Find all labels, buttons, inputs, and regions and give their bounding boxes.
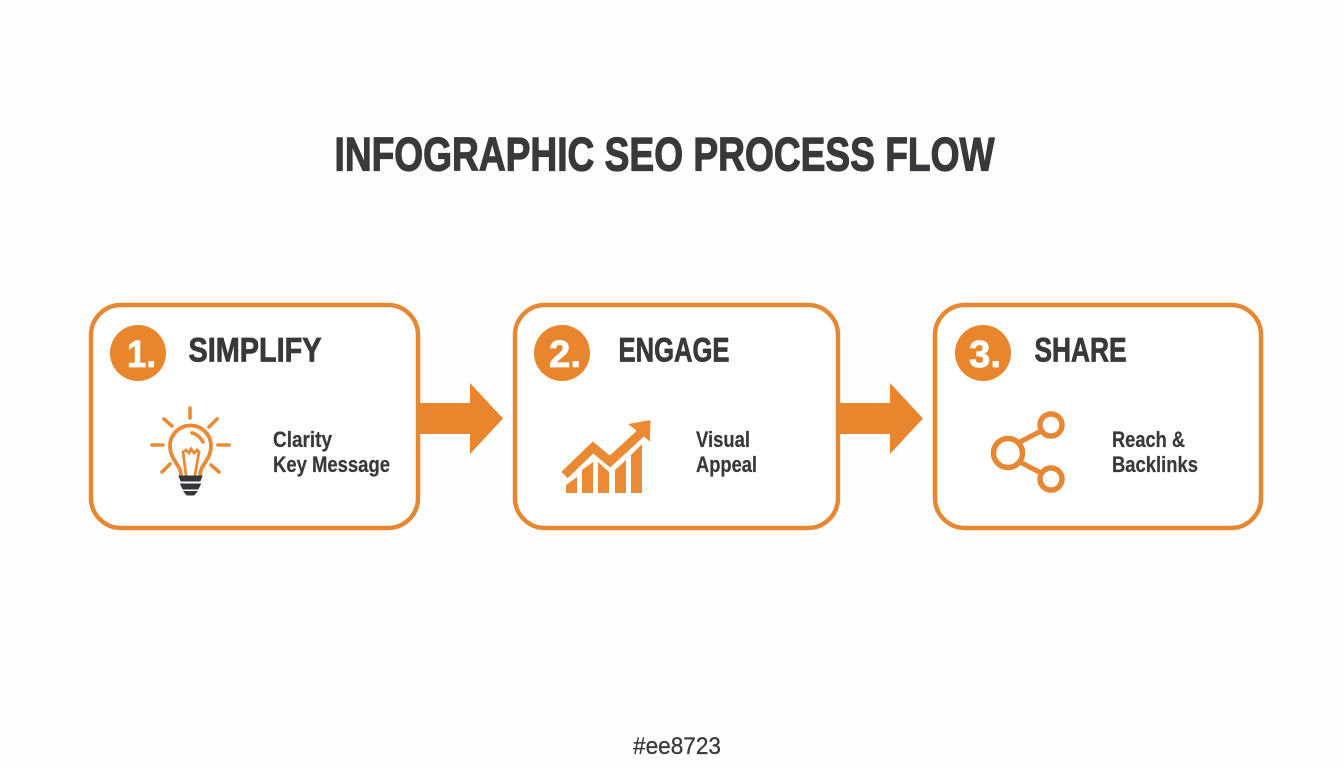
title: INFOGRAPHIC SEO PROCESS FLOW bbox=[334, 128, 995, 182]
card outline 2 bbox=[515, 305, 838, 528]
number badge 1: 1. bbox=[127, 334, 156, 376]
text: clarity key message: Clarity bbox=[273, 427, 332, 452]
icon: light bulb bbox=[152, 408, 229, 495]
arrow: engage to share bbox=[837, 383, 923, 454]
card outline 3 bbox=[935, 305, 1261, 528]
text: clarity key message: Key Message bbox=[273, 452, 390, 477]
panel: step 2 engage bbox=[515, 305, 838, 528]
heading: simplify: SIMPLIFY bbox=[188, 332, 322, 370]
number badge 2: 2. bbox=[549, 334, 581, 376]
text: visual appeal: Appeal bbox=[696, 452, 757, 477]
icon: rising chart bbox=[564, 420, 650, 493]
icon: share nodes bbox=[994, 414, 1062, 490]
panel: step 1 simplify bbox=[91, 305, 418, 528]
text: visual appeal bbox=[696, 427, 757, 477]
heading: share: SHARE bbox=[1034, 332, 1126, 370]
text: reach and backlinks: Reach & bbox=[1112, 427, 1185, 452]
text: clarity key message bbox=[273, 427, 390, 477]
number badge 3 bbox=[955, 325, 1011, 381]
text: reach and backlinks bbox=[1112, 427, 1198, 477]
footer colour code: #ee8723 bbox=[633, 733, 721, 760]
number badge 3: 3. bbox=[969, 334, 1001, 376]
panel: step 3 share bbox=[935, 305, 1261, 528]
text: visual appeal: Visual bbox=[696, 427, 750, 452]
number badge 1 bbox=[110, 325, 166, 381]
arrow: simplify to engage bbox=[417, 383, 503, 454]
number badge 2 bbox=[534, 325, 590, 381]
text: reach and backlinks: Backlinks bbox=[1112, 452, 1198, 477]
heading: engage: ENGAGE bbox=[618, 332, 730, 370]
card outline 1 bbox=[91, 305, 418, 528]
